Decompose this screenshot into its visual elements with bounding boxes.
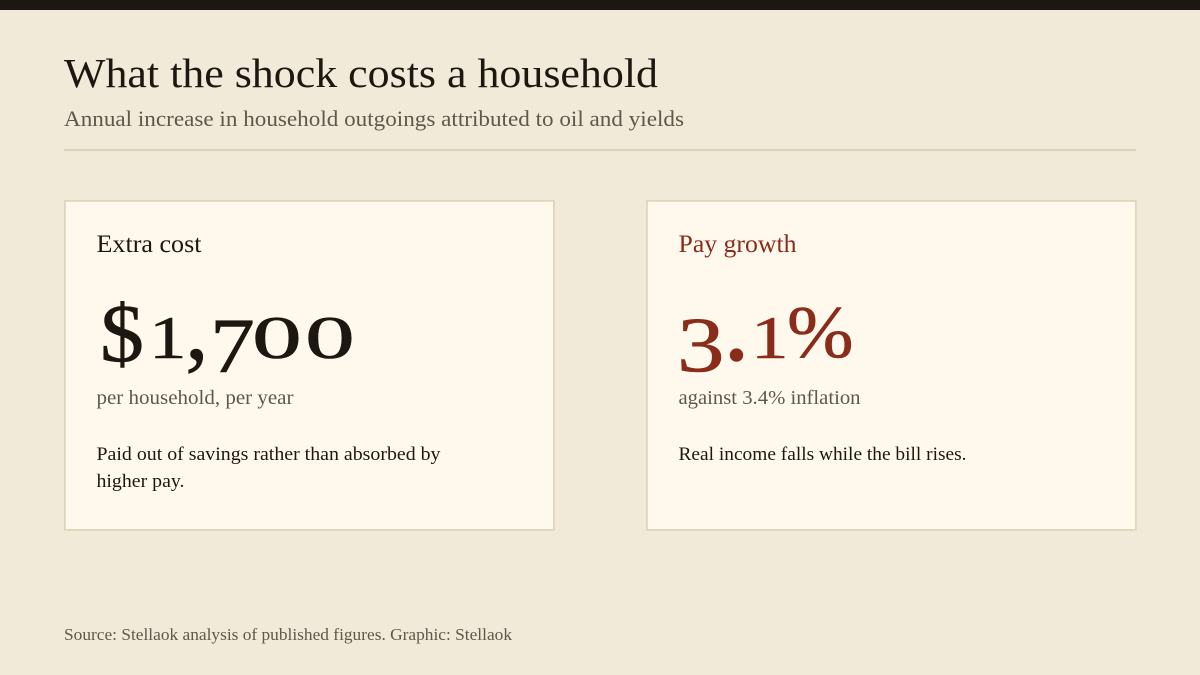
title: What the shock costs a household — [64, 50, 658, 96]
number caption: per household, per year — [96, 387, 294, 409]
top bar — [0, 0, 1200, 10]
big number: $1,700: $ — [100, 287, 144, 379]
body text: higher pay. — [96, 471, 184, 492]
big number: $1,700 — [90, 280, 510, 390]
source line: Source: Stellaok analysis of published figures. Graphic: Stellaok — [64, 625, 513, 644]
subtitle: Annual increase in household outgoings attributed to oil and yields — [64, 106, 684, 131]
panel: extra cost — [65, 201, 554, 530]
body text: Real income falls while the bill rises. — [678, 444, 966, 465]
card heading: Extra cost — [96, 231, 202, 258]
big number: $1,700: 0 — [305, 305, 355, 371]
big number: 3.1%: % — [787, 292, 854, 374]
card background — [647, 201, 1136, 530]
number caption: against 3.4% inflation — [678, 387, 860, 409]
big number: 3.1%: 1 — [751, 305, 788, 371]
big number: $1,700: 7 — [210, 302, 255, 389]
body text: Paid out of savings rather than absorbed by — [96, 444, 441, 465]
body text — [96, 444, 441, 492]
big number: 3.1% — [670, 280, 1090, 390]
card heading: Pay growth — [678, 231, 797, 258]
panel: pay growth — [647, 201, 1136, 530]
big number: $1,700: 0 — [252, 305, 302, 371]
big number: $1,700: 1 — [149, 305, 186, 371]
card background — [65, 201, 554, 530]
big number: 3.1%: 3 — [677, 301, 725, 388]
